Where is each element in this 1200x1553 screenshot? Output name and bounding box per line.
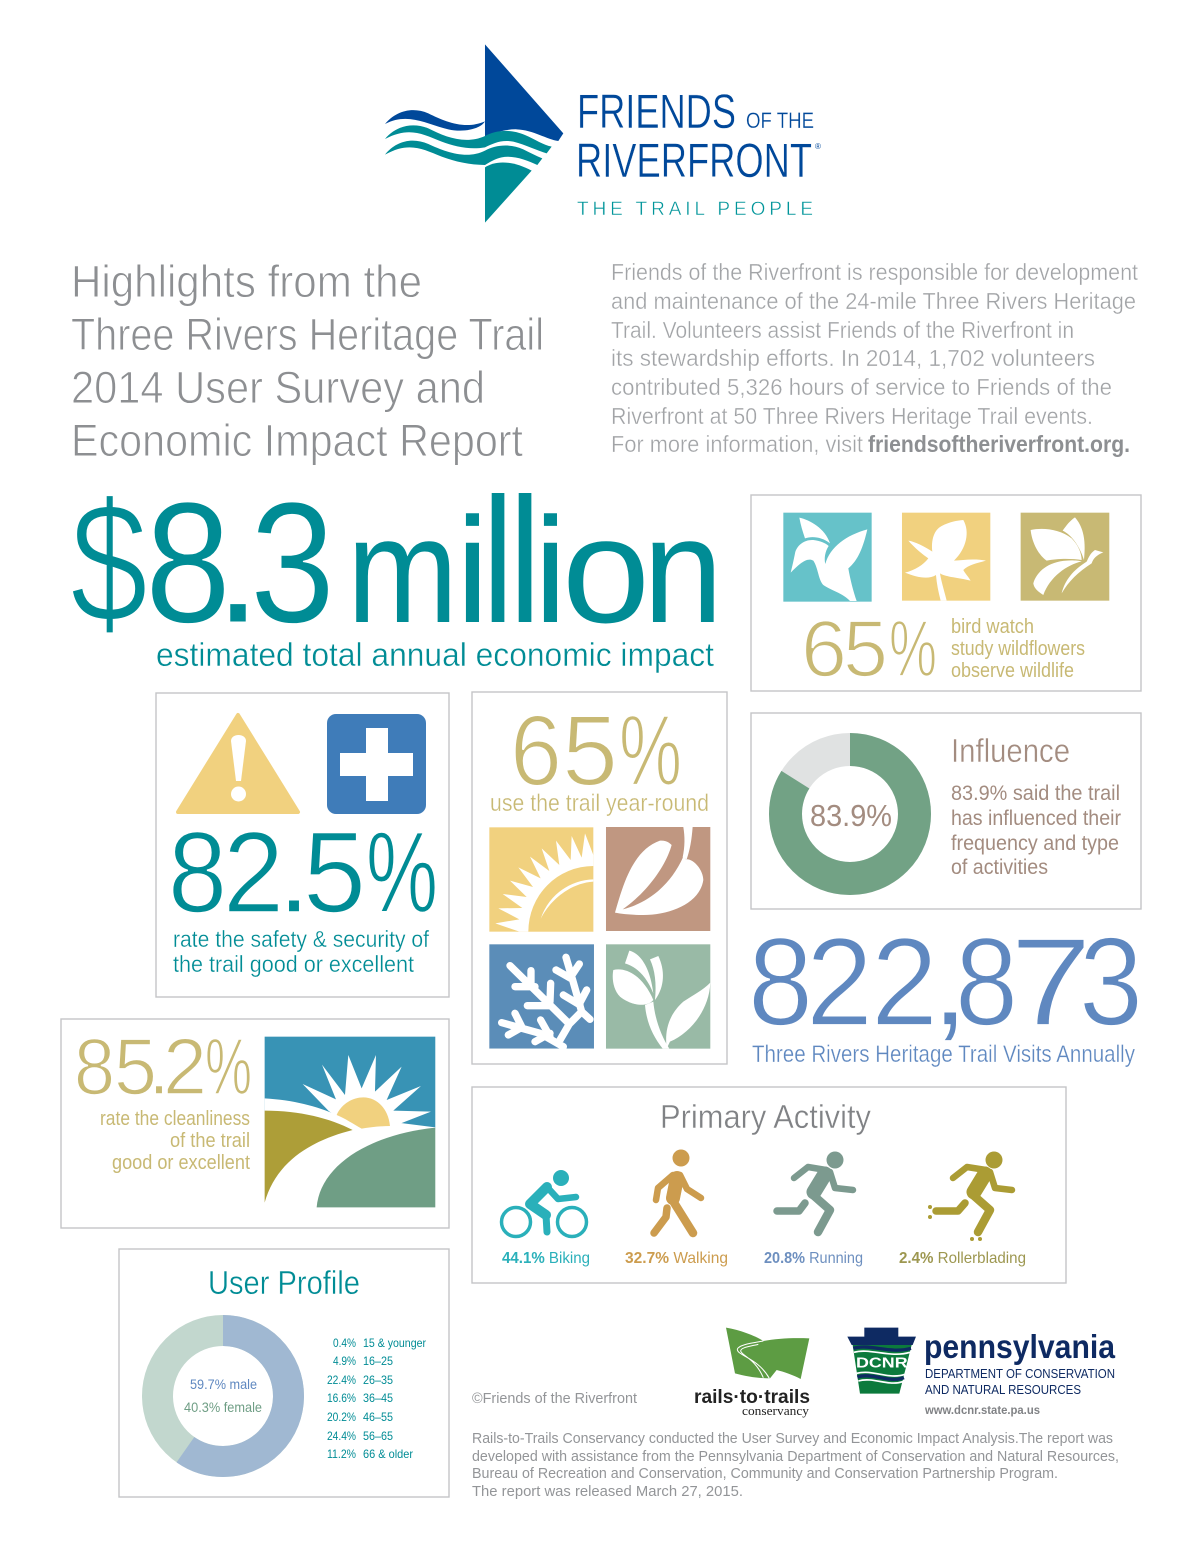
icon: winter snowflake [489, 944, 598, 1053]
panel: cleanliness [61, 1019, 449, 1228]
headline stat: $8.3 million: l [509, 461, 541, 660]
visits caption: Three Rivers Heritage Trail Visits Annually [752, 1041, 1135, 1068]
activity list [951, 616, 1085, 682]
wordmark: RIVERFRONT [576, 135, 812, 188]
intro text block: Riverfront at 50 Three Rivers Heritage Trail events. [611, 403, 1093, 429]
stat: annual visits [748, 913, 1143, 1068]
stat: annual visits: 7 [1010, 913, 1092, 1052]
intro text block: friendsoftheriverfront.org. [868, 431, 1130, 457]
credits text block: Rails-to-Trails Conservancy conducted the User Survey and Economic Impact Analysis.The report was [472, 1431, 1113, 1447]
cleanliness caption: rate the cleanliness [100, 1108, 250, 1130]
activity list: observe wildlife [951, 660, 1074, 682]
panel: year-round use [472, 692, 727, 1064]
stat: 65%: 6 [510, 695, 562, 807]
logo: rails-to-trails conservancy [694, 1328, 810, 1418]
headline stat: $8.3 million: i [534, 486, 567, 654]
panel: primary activity [472, 1087, 1066, 1283]
donut value: 83.9% [810, 798, 892, 833]
age table [327, 1336, 426, 1461]
heading: Three Rivers Heritage Trail [71, 309, 544, 360]
stat: 85.2%: 2 [163, 1022, 207, 1111]
icon: keystone [847, 1328, 916, 1394]
intro text block: its stewardship efforts. In 2014, 1,702 volunteers [611, 345, 1095, 371]
headline stat: $8.3 million: m [347, 486, 458, 654]
label: walking: 32.7% Walking [625, 1250, 728, 1267]
panel: user profile [119, 1249, 449, 1497]
website: www.dcnr.state.pa.us [924, 1405, 1040, 1417]
stat: 65%: % [619, 695, 682, 807]
primary activity heading: Primary Activity [660, 1098, 871, 1135]
icon: butterfly [1021, 513, 1109, 601]
headline stat: $8.3 million [70, 461, 723, 673]
credits text block: developed with assistance from the Pennsylvania Department of Conservation and Natural Resources, [472, 1449, 1119, 1465]
stat: 65%: % [889, 604, 937, 693]
wordmark: pennsylvania [924, 1328, 1116, 1397]
heading [71, 256, 544, 466]
safety caption: rate the safety & security of [173, 926, 430, 952]
tagline: THE TRAIL PEOPLE [577, 199, 813, 220]
icon: summer sun [489, 827, 593, 932]
label: biking: 44.1% Biking [502, 1250, 590, 1267]
stat: annual visits: , [930, 913, 970, 1052]
age table: 11.2% [327, 1447, 356, 1461]
wordmark: OF THE [746, 108, 814, 133]
age table: 66 & older [363, 1447, 413, 1461]
icon: running [777, 1152, 853, 1232]
influence text [951, 782, 1121, 879]
age table: 16–25 [363, 1354, 393, 1368]
stat: 85.2%: % [205, 1022, 252, 1111]
headline stat: $8.3 million: 3 [250, 467, 335, 659]
logo: Friends of the Riverfront [385, 44, 821, 223]
label: rollerblading: 2.4% Rollerblading [899, 1250, 1026, 1267]
age table: 24.4% [327, 1429, 356, 1443]
age table: 36–45 [363, 1391, 393, 1405]
wordmark: FRIENDS [577, 86, 736, 139]
headline stat: $8.3 million: n [643, 486, 723, 654]
headline stat: $8.3 million: 8 [145, 467, 231, 659]
headline stat: $8.3 million: $ [70, 467, 148, 659]
safety caption: the trail good or excellent [173, 951, 415, 977]
heading: Economic Impact Report [71, 415, 523, 466]
user profile heading: User Profile [208, 1264, 360, 1301]
activity list: bird watch [951, 616, 1034, 638]
gender values: 59.7% male [190, 1376, 257, 1392]
headline stat: $8.3 million: i [456, 486, 489, 654]
caption: economic impact: estimated total annual economic impact [156, 636, 714, 673]
age table: 22.4% [327, 1373, 356, 1387]
activity list: study wildflowers [951, 638, 1085, 660]
influence text: of activities [951, 856, 1048, 879]
cleanliness caption [100, 1108, 250, 1174]
wordmark: ® [815, 142, 821, 151]
influence text: frequency and type [951, 832, 1119, 855]
intro text block: and maintenance of the 24-mile Three Rivers Heritage [611, 288, 1136, 314]
intro text block: Trail. Volunteers assist Friends of the Riverfront in [611, 317, 1074, 343]
intro text block: Friends of the Riverfront is responsible for development [611, 259, 1139, 285]
credits text block: Bureau of Recreation and Conservation, Community and Conservation Partnership Program. [472, 1466, 1058, 1482]
intro text block: contributed 5,326 hours of service to Friends of the [611, 374, 1112, 400]
influence text: 83.9% said the trail [951, 782, 1120, 805]
age table: 16.6% [327, 1391, 356, 1405]
stat: 65%: 5 [843, 604, 888, 693]
copyright: ©Friends of the Riverfront [472, 1391, 637, 1407]
icon: sunrise landscape [265, 1037, 435, 1207]
icon: rollerblading [928, 1152, 1012, 1241]
stat: 82.5%: 8 [168, 809, 227, 937]
icon: bird [783, 513, 872, 602]
gender values [184, 1376, 262, 1415]
heading: Highlights from the [71, 256, 422, 307]
credits text block: The report was released March 27, 2015. [472, 1484, 743, 1500]
cleanliness caption: good or excellent [112, 1152, 250, 1174]
panel: safety and security [156, 693, 449, 997]
logo: rails-to-trails conservancy: conservancy [742, 1403, 810, 1418]
influence text: has influenced their [951, 807, 1121, 830]
stat: annual visits: 8 [748, 913, 813, 1052]
stat: 65%: 5 [562, 695, 618, 807]
stat: 85.2%: 5 [114, 1022, 157, 1111]
panel: influence [751, 713, 1141, 909]
stat: 82.5%: % [366, 809, 438, 937]
icon: warning triangle [178, 715, 298, 812]
stat: 85.2%: 8 [74, 1022, 115, 1111]
icon: first aid cross [327, 714, 426, 814]
influence heading: Influence [951, 732, 1070, 769]
wordmark [576, 86, 821, 188]
age table: 0.4% [333, 1336, 356, 1350]
safety caption [173, 926, 430, 977]
stat: annual visits: 8 [955, 913, 1018, 1052]
headline stat: $8.3 million: o [562, 486, 650, 654]
headline stat: $8.3 million: . [214, 467, 262, 659]
wordmark: pennsylvania: pennsylvania [924, 1328, 1116, 1365]
icon: sail and waves mark [385, 44, 563, 223]
year-round caption: use the trail year-round [490, 790, 709, 817]
stat: annual visits: 3 [1079, 913, 1143, 1052]
icon: walking [654, 1150, 701, 1233]
donut chart: gender split [158, 1330, 288, 1462]
logo: rails-to-trails conservancy: rails·to·trails [694, 1387, 810, 1408]
label: running: 20.8% Running [764, 1250, 863, 1267]
intro text block [611, 259, 1139, 457]
panel: wildlife activities [751, 495, 1141, 693]
icon: autumn leaf [606, 827, 710, 931]
stat: annual visits: 2 [871, 913, 938, 1052]
age table: 46–55 [363, 1410, 393, 1424]
wordmark: pennsylvania: DEPARTMENT OF CONSERVATION [925, 1366, 1115, 1381]
stat: 82.5%: 5 [303, 809, 366, 937]
cleanliness caption: of the trail [170, 1130, 250, 1152]
icon: wildflower [902, 513, 990, 601]
headline stat: $8.3 million: l [482, 461, 514, 660]
donut chart: 83.9% influenced [786, 750, 914, 878]
credits text block [472, 1431, 1119, 1500]
age table: 4.9% [333, 1354, 356, 1368]
stat: annual visits: 2 [806, 913, 873, 1052]
stat: 82.5%: 2 [223, 809, 284, 937]
age table: 20.2% [327, 1410, 356, 1424]
heading: 2014 User Survey and [71, 362, 485, 413]
icon: keystone: DCNR [856, 1356, 908, 1372]
stat: 85.2%: . [148, 1022, 170, 1111]
icon: biking [502, 1170, 586, 1236]
wordmark: pennsylvania: AND NATURAL RESOURCES [925, 1382, 1081, 1397]
age table: 26–35 [363, 1373, 393, 1387]
stat: 82.5%: . [277, 809, 311, 937]
age table: 15 & younger [363, 1336, 426, 1350]
intro text block: For more information, visit [611, 431, 864, 457]
gender values: 40.3% female [184, 1399, 262, 1415]
logo: Pennsylvania DCNR [847, 1328, 1116, 1417]
icon: spring tulip [606, 944, 710, 1049]
stat: 65%: 6 [801, 604, 847, 693]
age table: 56–65 [363, 1429, 393, 1443]
